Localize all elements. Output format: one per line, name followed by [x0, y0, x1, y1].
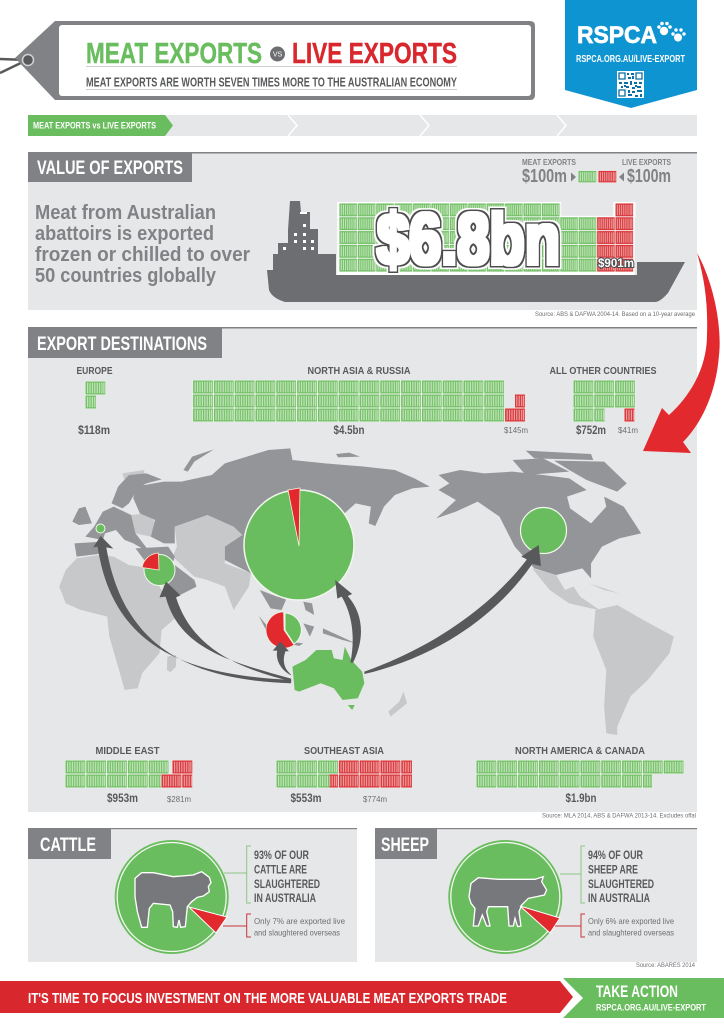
callout: slaughtered in Australia: IN AUSTRALIA — [254, 893, 316, 905]
Europe bars: $118m — [78, 423, 110, 437]
pie: Middle East — [142, 553, 175, 586]
legend: $100m — [522, 166, 567, 186]
North Asia and Russia bars: $4.5bn — [334, 423, 364, 437]
callout: slaughtered in Australia — [560, 846, 654, 905]
text block: frozen or chilled to over — [35, 244, 250, 266]
luggage tag header — [0, 21, 535, 100]
North America and Canada bars — [476, 745, 684, 805]
callout: slaughtered in Australia: SLAUGHTERED — [254, 879, 320, 891]
legend: $100m — [627, 166, 671, 186]
light grey land — [59, 470, 674, 735]
legend — [522, 157, 671, 186]
footer: red banner — [0, 981, 573, 1013]
text block — [35, 202, 250, 287]
All other countries bars: $752m — [576, 423, 606, 437]
arrow to Middle East — [159, 582, 291, 681]
legend: MEAT EXPORTS — [522, 157, 576, 167]
big red arrow — [643, 253, 720, 453]
title — [86, 38, 457, 70]
heading: EXPORT DESTINATIONS — [37, 334, 207, 355]
navigation bar — [28, 115, 697, 136]
arrow to Europe — [93, 536, 291, 683]
North Asia and Russia bars — [193, 365, 528, 437]
callout: exported live: and slaughtered overseas — [588, 928, 674, 938]
heading — [375, 829, 437, 859]
callout: slaughtered in Australia: 94% OF OUR — [588, 850, 644, 862]
North Asia and Russia bars: $145m — [504, 426, 528, 435]
Europe bars: EUROPE — [76, 365, 112, 377]
pie: North Asia and Russia — [244, 488, 354, 600]
All other countries bars: ALL OTHER COUNTRIES — [550, 365, 656, 377]
callout: exported live — [555, 914, 674, 938]
panel: sheep — [375, 828, 697, 962]
heading: VALUE OF EXPORTS — [37, 158, 183, 179]
subtitle: MEAT EXPORTS ARE WORTH SEVEN TIMES MORE TO THE AUSTRALIAN ECONOMY — [86, 74, 457, 90]
live value: $901m — [598, 258, 634, 270]
callout: exported live — [223, 914, 345, 938]
heading — [28, 829, 111, 859]
Middle East bars: $953m — [107, 791, 138, 805]
callout: exported live: and slaughtered overseas — [254, 928, 340, 938]
red wedge — [520, 906, 560, 933]
callout: slaughtered in Australia: SHEEP ARE — [588, 864, 638, 876]
RSPCA blue banner — [565, 0, 697, 108]
icon: paw prints — [657, 22, 686, 42]
big value: $6.8bn — [377, 200, 560, 280]
source note: Source: ABS & DAFWA 2004-14. Based on a 10-year average — [535, 311, 695, 318]
callout: slaughtered in Australia — [224, 846, 320, 905]
heading — [28, 328, 222, 358]
footer: take action: TAKE ACTION — [596, 983, 678, 1001]
pie: Southeast Asia — [266, 612, 301, 648]
callout: exported live: Only 6% are exported live — [588, 916, 674, 926]
arrow to Southeast Asia — [273, 642, 291, 675]
legend: LIVE EXPORTS — [622, 157, 671, 167]
Middle East bars: $281m — [167, 795, 191, 804]
callout: exported live: Only 7% are exported live — [254, 916, 345, 926]
red wedge — [189, 907, 227, 933]
circle with sheep — [448, 840, 562, 954]
dark grey land — [72, 448, 641, 646]
text block: Meat from Australian — [35, 202, 216, 224]
panel: export destinations — [28, 327, 697, 812]
callout: slaughtered in Australia: 93% OF OUR — [254, 850, 310, 862]
All other countries bars — [550, 365, 656, 437]
RSPCA logo: RSPCA — [577, 22, 657, 49]
arrow to North America — [364, 545, 541, 674]
heading: CATTLE — [40, 835, 96, 856]
pie: North America and Canada — [520, 508, 566, 554]
active step — [28, 115, 173, 136]
source note: Source: MLA 2014, ABS & DAFWA 2013-14. Excludes offal — [542, 812, 696, 820]
web address: RSPCA.ORG.AU/LIVE-EXPORT — [576, 54, 685, 65]
text block: abattoirs is exported — [35, 223, 214, 245]
icon: QR code — [617, 71, 644, 98]
title: LIVE EXPORTS — [292, 38, 457, 70]
Middle East bars: MIDDLE EAST — [96, 745, 160, 757]
callout: slaughtered in Australia: SLAUGHTERED — [588, 879, 654, 891]
ship containers — [337, 202, 635, 275]
footer: red banner: IT'S TIME TO FOCUS INVESTMENT ON THE MORE VALUABLE MEAT EXPORTS TRADE — [28, 991, 507, 1007]
icon: sheep — [469, 877, 547, 927]
heading: SHEEP — [381, 835, 429, 856]
panel: value of exports — [28, 152, 697, 310]
title: MEAT EXPORTS — [86, 38, 262, 70]
All other countries bars: $41m — [618, 426, 638, 435]
tag body — [15, 21, 535, 100]
Southeast Asia bars: $774m — [363, 795, 387, 804]
Southeast Asia bars: SOUTHEAST ASIA — [304, 745, 384, 757]
source note: Source: ABARES 2014 — [636, 962, 695, 969]
title: VS — [273, 52, 282, 58]
callout: slaughtered in Australia: CATTLE ARE — [254, 864, 307, 876]
circle with cow — [115, 840, 229, 954]
North America and Canada bars: $1.9bn — [566, 791, 596, 805]
arrow to North Asia — [335, 580, 361, 663]
panel: cattle — [28, 828, 357, 962]
Southeast Asia bars — [276, 745, 412, 805]
tag eyelet — [22, 54, 34, 66]
icon: cow — [135, 872, 211, 927]
Southeast Asia bars: $553m — [290, 791, 322, 805]
Europe bars — [76, 365, 112, 437]
footer: take action — [563, 978, 724, 1018]
callout: slaughtered in Australia: IN AUSTRALIA — [588, 893, 650, 905]
Middle East bars — [65, 745, 193, 805]
North America and Canada bars: NORTH AMERICA & CANADA — [515, 745, 645, 757]
ship — [267, 201, 685, 302]
heading — [28, 153, 192, 182]
Australia — [292, 647, 364, 710]
text block: 50 countries globally — [35, 265, 217, 287]
North Asia and Russia bars: NORTH ASIA & RUSSIA — [308, 365, 411, 377]
flow arrows from Australia — [93, 536, 541, 683]
world map — [59, 448, 674, 735]
active step: MEAT EXPORTS vs LIVE EXPORTS — [33, 120, 156, 130]
tag strings — [0, 59, 27, 73]
pie: Europe — [96, 524, 105, 533]
